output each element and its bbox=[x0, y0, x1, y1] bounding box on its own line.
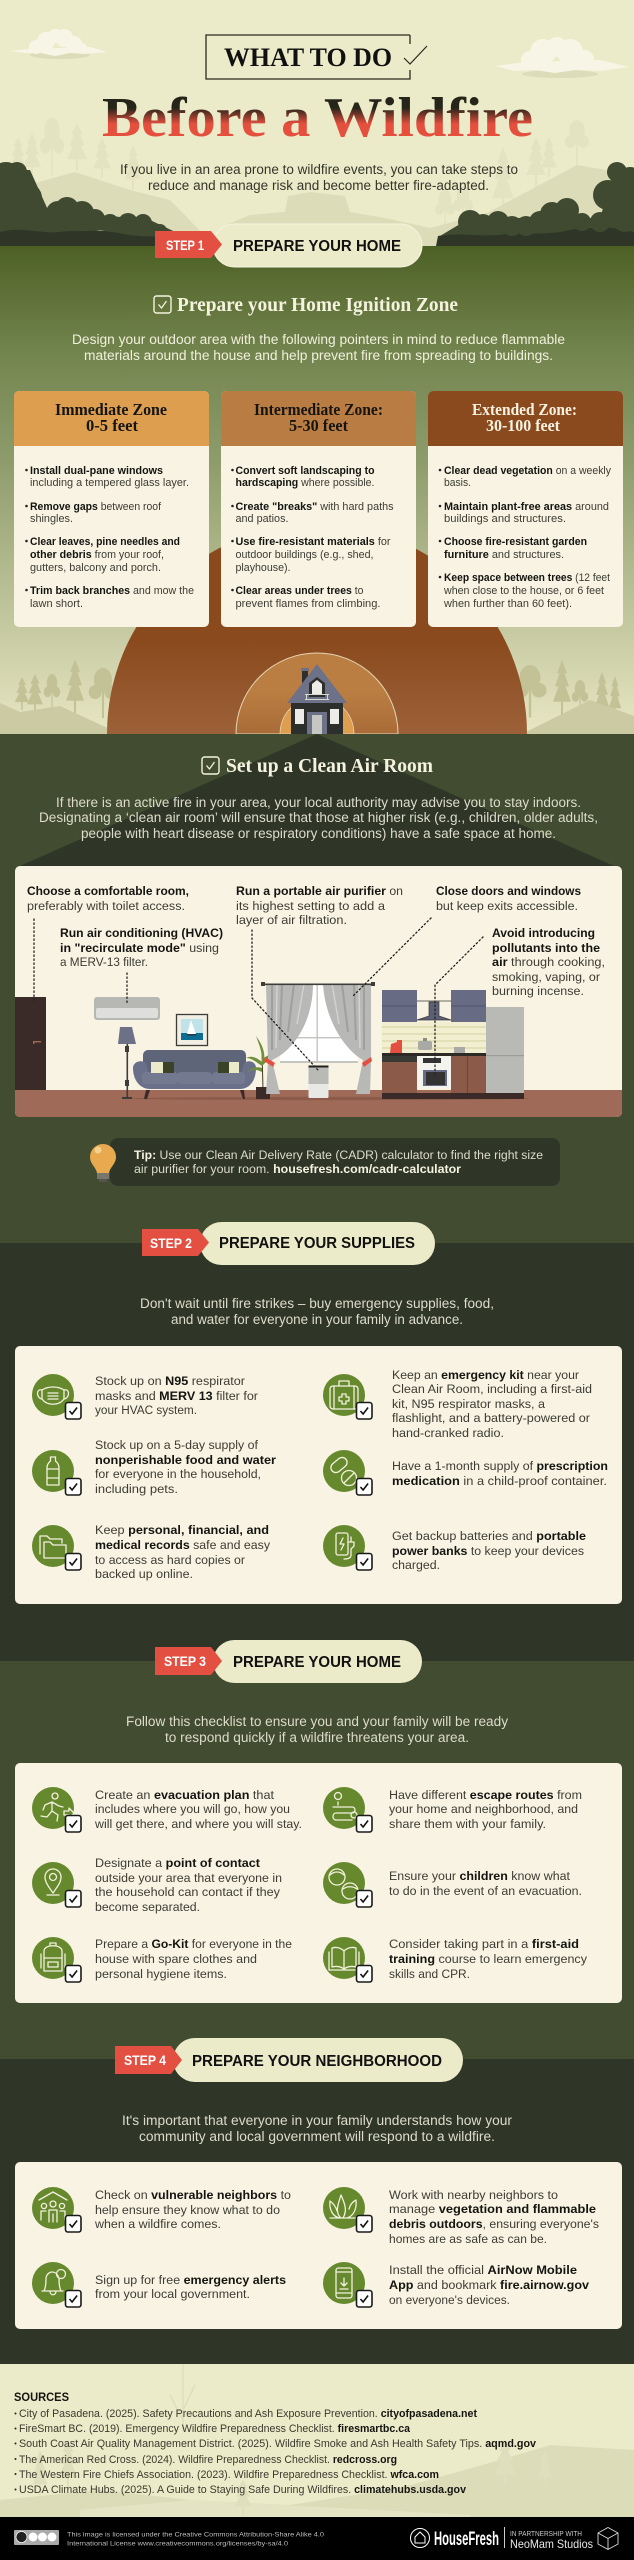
illustration: cloud left bbox=[10, 29, 107, 59]
tip text: air purifier for your room. housefresh.com/cadr-calculator bbox=[134, 1162, 461, 1176]
item: food and water: Stock up on a 5-day supply of bbox=[95, 1438, 259, 1452]
sources list: USDA Climate Hubs. (2025). A Guide to Staying Safe During Wildfires. climatehubs.usda.gov bbox=[19, 2484, 466, 2496]
item: point of contact: Designate a point of contact bbox=[95, 1856, 260, 1870]
zone checklist: including a tempered glass layer. bbox=[30, 477, 189, 489]
illustration: cloud right bbox=[495, 37, 629, 78]
item: emergency alerts bbox=[32, 2262, 286, 2307]
item: airnow app: Install the official AirNow Mobile bbox=[389, 2263, 577, 2277]
callout: pollutants: Avoid introducing bbox=[492, 926, 595, 940]
sources heading: SOURCES bbox=[14, 2390, 69, 2404]
item: masks and filter: Stock up on N95 respirator bbox=[95, 1374, 245, 1388]
item: go-kit: house with spare clothes and bbox=[95, 1952, 257, 1966]
logo: NeoMam Studios: NeoMam Studios bbox=[510, 2537, 593, 2551]
item: go-kit: Prepare a Go-Kit for everyone in the bbox=[95, 1937, 292, 1951]
item: point of contact bbox=[32, 1856, 282, 1914]
zone checklist: Clear leaves, pine needles and bbox=[30, 536, 180, 548]
item: vulnerable neighbors: help ensure they know what to do bbox=[95, 2203, 280, 2217]
zone checklist: when further than 60 feet). bbox=[443, 598, 572, 610]
item: vegetation and debris bbox=[323, 2187, 599, 2246]
illustration: dark bushes right bbox=[436, 162, 634, 246]
zone checklist: when close to the house, or 6 feet bbox=[443, 585, 605, 597]
zone heading: 5-30 feet bbox=[289, 416, 348, 435]
callout: air conditioning: Run air conditioning (HVAC) bbox=[60, 926, 223, 940]
callout: air purifier: its highest setting to add a bbox=[236, 899, 385, 913]
icon: open book bbox=[323, 1937, 372, 1982]
floor bbox=[15, 1090, 622, 1117]
item: records: to access as hard copies or bbox=[95, 1553, 245, 1567]
panel: extended zone bbox=[428, 391, 623, 627]
callout: pollutants bbox=[492, 926, 605, 998]
zone checklist bbox=[439, 465, 611, 610]
logo: HouseFresh: HouseFresh bbox=[434, 2529, 499, 2550]
sources list: The Western Fire Chiefs Association. (2023). Wildfire Preparedness Checklist. wfca.com bbox=[19, 2469, 439, 2481]
item: escape routes bbox=[323, 1787, 582, 1832]
item: prescription medication: Have a 1-month supply of prescription bbox=[392, 1459, 608, 1473]
clean air room description: people with heart disease or respiratory conditions) have a safe space at home. bbox=[81, 826, 556, 841]
item: vulnerable neighbors: Check on vulnerable neighbors to bbox=[95, 2188, 291, 2202]
curtain left bbox=[264, 984, 313, 1094]
item: first-aid training: training course to learn emergency bbox=[389, 1952, 588, 1966]
item: emergency kit: Keep an emergency kit near your bbox=[392, 1368, 579, 1382]
item: point of contact: outside your area that everyone in bbox=[95, 1871, 282, 1885]
item: first-aid training bbox=[323, 1937, 588, 1982]
item: evacuation plan: includes where you will go, how you bbox=[95, 1802, 290, 1816]
sources list: City of Pasadena. (2025). Safety Precautions and Ash Exposure Prevention. cityofpasadena.net bbox=[19, 2408, 477, 2420]
intro text bbox=[120, 162, 518, 193]
kitchen bbox=[382, 990, 524, 1099]
icon: bell bbox=[32, 2262, 81, 2307]
ignition zone description: Design your outdoor area with the following pointers in mind to reduce flammable bbox=[72, 332, 565, 347]
sofa bbox=[133, 1050, 256, 1099]
panel: immediate zone bbox=[14, 391, 209, 627]
item: emergency kit: kit, N95 respirator masks, a bbox=[392, 1397, 545, 1411]
ignition zone description: materials around the house and help prevent fire from spreading to buildings. bbox=[84, 348, 553, 363]
inner arch: immediate zone bbox=[280, 697, 354, 734]
zone checklist: buildings and structures. bbox=[444, 513, 566, 525]
illustration: sources landscape bbox=[0, 2364, 634, 2517]
item: first-aid training: skills and CPR. bbox=[389, 1967, 470, 1981]
item: evacuation plan bbox=[32, 1787, 302, 1832]
callout: doors and windows: Close doors and windows bbox=[436, 884, 581, 898]
callout: air purifier bbox=[236, 884, 403, 927]
callout: pollutants: air through cooking, bbox=[492, 955, 605, 969]
roof shape behind heading bbox=[20, 734, 614, 866]
icon: folders bbox=[32, 1525, 81, 1570]
callout: pollutants: smoking, vaping, or bbox=[492, 970, 600, 984]
sources list bbox=[14, 2408, 536, 2496]
step 3 description bbox=[126, 1714, 508, 1745]
section background: step 4 bbox=[0, 2059, 634, 2364]
item: point of contact: the household can contact if they bbox=[95, 1885, 281, 1899]
step 4 description bbox=[122, 2113, 513, 2144]
item: emergency alerts: Sign up for free emergency alerts bbox=[95, 2273, 286, 2287]
item: airnow app bbox=[323, 2262, 589, 2307]
item: food and water: for everyone in the household, bbox=[95, 1467, 261, 1481]
zone checklist: hardscaping where possible. bbox=[236, 477, 374, 489]
ignition zone description bbox=[72, 332, 565, 363]
zone checklist: outdoor buildings (e.g., shed, bbox=[236, 549, 374, 561]
sources list: FireSmart BC. (2019). Emergency Wildfire Preparedness Checklist. firesmartbc.ca bbox=[19, 2423, 410, 2435]
step 2 description: and water for everyone in your family in advance. bbox=[171, 1312, 463, 1327]
sources list: South Coast Air Quality Management District. (2025). Wildfire Smoke and Ash Health Safety Tips. aqmd.gov bbox=[19, 2438, 536, 2450]
clean air room description: Designating a ‘clean air room’ will ensure that those at higher risk (e.g., children, older adults, bbox=[39, 810, 598, 825]
step 4 badge bbox=[115, 2038, 463, 2082]
item: vegetation and debris: Work with nearby neighbors to bbox=[389, 2188, 558, 2202]
zone heading: 0-5 feet bbox=[86, 416, 138, 435]
callout: pollutants: pollutants into the bbox=[492, 941, 600, 955]
zone heading: Immediate Zone bbox=[55, 400, 167, 419]
item: evacuation plan: will get there, and where you will stay. bbox=[94, 1817, 302, 1831]
item: airnow app: App and bookmark fire.airnow.gov bbox=[389, 2278, 589, 2292]
icon: creative commons badge bbox=[14, 2530, 59, 2545]
icon: first-aid kit bbox=[323, 1374, 372, 1419]
step 2 description: Don't wait until fire strikes – buy emergency supplies, food, bbox=[140, 1296, 494, 1311]
zone checklist: and patios. bbox=[236, 513, 288, 525]
intro text: reduce and manage risk and become better fire-adapted. bbox=[148, 178, 489, 193]
item: records: Keep personal, financial, and bbox=[95, 1523, 269, 1537]
background: sky bbox=[0, 0, 634, 246]
panel: clean air room illustration bbox=[15, 866, 622, 1117]
zone checklist: Maintain plant-free areas around bbox=[444, 501, 609, 513]
item: escape routes: share them with your family. bbox=[389, 1817, 546, 1831]
icon: plants bbox=[323, 2187, 372, 2232]
item: vulnerable neighbors bbox=[32, 2187, 291, 2232]
license text bbox=[67, 2532, 324, 2548]
item: vulnerable neighbors: when a wildfire comes. bbox=[94, 2217, 221, 2231]
item: batteries: power banks to keep your devices bbox=[392, 1544, 584, 1558]
step 1 badge: PREPARE YOUR HOME bbox=[233, 238, 401, 255]
item: records: backed up online. bbox=[95, 1567, 193, 1581]
step 4 badge: PREPARE YOUR NEIGHBORHOOD bbox=[192, 2053, 442, 2070]
zone checklist: lawn short. bbox=[30, 598, 83, 610]
callout: air conditioning bbox=[60, 926, 223, 969]
item: prescription medication bbox=[323, 1450, 608, 1495]
middle arch: intermediate zone bbox=[236, 653, 398, 734]
item: food and water: including pets. bbox=[95, 1482, 178, 1496]
item: emergency kit: hand-cranked radio. bbox=[392, 1426, 504, 1440]
item: vegetation and debris: manage vegetation and flammable bbox=[389, 2202, 596, 2216]
step 4 badge: STEP 4 bbox=[124, 2052, 166, 2068]
section background: step 1 green gradient bbox=[0, 246, 634, 734]
footer bar bbox=[0, 2517, 634, 2560]
zone checklist: Use fire-resistant materials for bbox=[236, 536, 391, 548]
item: batteries: charged. bbox=[392, 1558, 440, 1572]
floor lamp bbox=[118, 1027, 136, 1099]
icon: house bbox=[287, 664, 347, 734]
zone heading: 30-100 feet bbox=[486, 416, 560, 435]
callout: comfortable room: preferably with toilet access. bbox=[27, 899, 185, 913]
item: prescription medication: medication in a child-proof container. bbox=[392, 1474, 607, 1488]
illustration: dark bushes left bbox=[0, 162, 200, 246]
item: vegetation and debris: debris outdoors, ensuring everyone's bbox=[389, 2217, 599, 2231]
item: children: Ensure your children know what bbox=[389, 1869, 571, 1883]
item: records: medical records safe and easy bbox=[95, 1538, 271, 1552]
zone checklist: shingles. bbox=[30, 513, 73, 525]
zone checklist: Install dual-pane windows bbox=[30, 465, 163, 477]
zone checklist bbox=[231, 465, 394, 610]
item: batteries bbox=[323, 1525, 586, 1572]
callout: doors and windows bbox=[436, 884, 581, 913]
item: batteries: Get backup batteries and portable bbox=[392, 1529, 586, 1543]
panel: home checklist bbox=[15, 1763, 622, 2003]
zone checklist: other debris from your roof, bbox=[30, 549, 164, 561]
zone checklist: Clear dead vegetation on a weekly bbox=[444, 465, 611, 477]
item: masks and filter bbox=[32, 1374, 258, 1419]
heading: home ignition zone: Prepare your Home Ignition Zone bbox=[177, 294, 458, 316]
item: food and water: nonperishable food and water bbox=[95, 1453, 276, 1467]
zone checklist: basis. bbox=[444, 477, 471, 489]
logo: NeoMam Studios bbox=[510, 2528, 618, 2551]
item: emergency kit bbox=[323, 1368, 592, 1440]
step 3 badge: PREPARE YOUR HOME bbox=[233, 1654, 401, 1671]
item: children bbox=[323, 1862, 582, 1907]
icon: map pin bbox=[32, 1862, 81, 1907]
item: escape routes: your home and neighborhood, and bbox=[389, 1802, 578, 1816]
item: point of contact: become separated. bbox=[95, 1900, 200, 1914]
kicker: what to do: WHAT TO DO bbox=[224, 42, 392, 72]
icon: water bottle bbox=[32, 1450, 81, 1495]
step 2 badge: PREPARE YOUR SUPPLIES bbox=[219, 1235, 415, 1252]
step 4 description: community and local government will respond to a wildfire. bbox=[139, 2129, 495, 2144]
clean air room description bbox=[39, 795, 598, 841]
callout: comfortable room bbox=[27, 884, 189, 913]
icon: backpack bbox=[32, 1937, 81, 1982]
callout: air conditioning: in "recirculate mode" using bbox=[60, 941, 219, 955]
license text: International License www.creativecommons.org/licenses/by-sa/4.0 bbox=[67, 2540, 288, 2548]
item: masks and filter: masks and MERV 13 filter for bbox=[95, 1389, 258, 1403]
heading: clean air room: Set up a Clean Air Room bbox=[226, 755, 433, 777]
step 1 badge bbox=[155, 224, 422, 267]
icon: pills bbox=[323, 1450, 372, 1495]
step 3 badge: STEP 3 bbox=[164, 1653, 206, 1669]
step 2 badge bbox=[142, 1222, 435, 1265]
zone checklist: furniture and structures. bbox=[444, 549, 564, 561]
illustration: hills and trees beside the arch bbox=[0, 659, 634, 734]
illustration: zone arches and house bbox=[107, 524, 527, 734]
item: evacuation plan: Create an evacuation plan that bbox=[95, 1788, 275, 1802]
zone checklist: Create "breaks" with hard paths bbox=[236, 501, 394, 513]
step 1 badge: STEP 1 bbox=[166, 237, 204, 253]
curtain rod bbox=[261, 982, 375, 986]
air purifier bbox=[308, 1066, 328, 1098]
tip text: Tip: Use our Clean Air Delivery Rate (CADR) calculator to find the right size bbox=[134, 1148, 543, 1162]
icon: power bank bbox=[323, 1525, 372, 1570]
zone checklist: prevent flames from climbing. bbox=[236, 598, 380, 610]
zone heading bbox=[254, 400, 383, 435]
zone checklist: Keep space between trees (12 feet bbox=[444, 572, 611, 584]
door bbox=[15, 997, 46, 1090]
icon: people under roof bbox=[32, 2187, 81, 2232]
callout: air purifier: Run a portable air purifier on bbox=[236, 884, 403, 898]
step 3 badge bbox=[155, 1640, 422, 1683]
item: children: to do in the event of an evacuation. bbox=[389, 1884, 582, 1898]
icon: route bbox=[323, 1787, 372, 1832]
icon: running person bbox=[32, 1787, 81, 1832]
potted plant bbox=[246, 1036, 274, 1099]
zone checklist: playhouse). bbox=[236, 562, 290, 574]
icon: mask bbox=[32, 1374, 81, 1419]
zone checklist: gutters, balcony and porch. bbox=[30, 562, 161, 574]
clean air room description: If there is an active fire in your area, your local authority may advise you to stay indoors. bbox=[56, 795, 581, 810]
zone checklist: Convert soft landscaping to bbox=[236, 465, 375, 477]
icon: children faces bbox=[323, 1862, 372, 1907]
title: Before a Wildfire bbox=[102, 87, 533, 149]
section background: step 3 bbox=[0, 1661, 634, 2059]
zone checklist bbox=[25, 465, 194, 610]
section background: clean air room bbox=[0, 734, 634, 1243]
item: go-kit: personal hygiene items. bbox=[95, 1967, 227, 1981]
wall picture bbox=[176, 1014, 208, 1046]
section background: step 2 bbox=[0, 1243, 634, 1661]
zone heading bbox=[472, 400, 577, 435]
zone checklist: Clear areas under trees to bbox=[236, 585, 364, 597]
intro text: If you live in an area prone to wildfire events, you can take steps to bbox=[120, 162, 518, 177]
illustration: pale background landscape bbox=[0, 118, 634, 246]
callout: comfortable room: Choose a comfortable room, bbox=[27, 884, 189, 898]
item: masks and filter: your HVAC system. bbox=[95, 1403, 197, 1417]
zone heading: Intermediate Zone: bbox=[254, 400, 383, 419]
license text: This image is licensed under the Creative Commons Attribution-Share Alike 4.0 bbox=[67, 2532, 324, 2538]
zone checklist: Trim back branches and mow the bbox=[30, 585, 194, 597]
tip text bbox=[134, 1148, 543, 1176]
tip callout bbox=[90, 1138, 560, 1186]
panel: neighborhood checklist bbox=[15, 2162, 622, 2329]
step 4 description: It's important that everyone in your family understands how your bbox=[122, 2113, 513, 2128]
item: airnow app: on everyone's devices. bbox=[389, 2293, 510, 2307]
sources list: The American Red Cross. (2024). Wildfire Preparedness Checklist. redcross.org bbox=[19, 2454, 397, 2466]
air conditioner bbox=[94, 997, 160, 1020]
item: vegetation and debris: homes are as safe as can be. bbox=[389, 2232, 547, 2246]
item: food and water bbox=[32, 1438, 276, 1496]
curtain right bbox=[323, 984, 372, 1094]
item: first-aid training: Consider taking part in a first-aid bbox=[389, 1937, 579, 1951]
section background: sources bbox=[0, 2364, 634, 2517]
callout: air conditioning: a MERV-13 filter. bbox=[60, 955, 148, 969]
item: go-kit bbox=[32, 1937, 292, 1982]
step 2 badge: STEP 2 bbox=[150, 1235, 192, 1251]
callout: pollutants: burning incense. bbox=[492, 984, 584, 998]
callout lines bbox=[34, 918, 483, 1075]
zone checklist: Remove gaps between roof bbox=[30, 501, 162, 513]
zone heading bbox=[55, 400, 167, 435]
icon: phone download bbox=[323, 2262, 372, 2307]
callout: doors and windows: but keep exits accessible. bbox=[436, 899, 578, 913]
item: emergency alerts: from your local government. bbox=[95, 2287, 250, 2301]
window bbox=[280, 985, 358, 1063]
outer arch: extended zone bbox=[107, 524, 527, 734]
zone heading: Extended Zone: bbox=[472, 400, 577, 419]
logo: HouseFresh bbox=[410, 2528, 499, 2550]
icon: light bulb bbox=[90, 1144, 116, 1182]
step 3 description: to respond quickly if a wildfire threatens your area. bbox=[165, 1730, 469, 1745]
callout: air purifier: layer of air filtration. bbox=[236, 913, 347, 927]
logo: NeoMam Studios: IN PARTNERSHIP WITH bbox=[510, 2531, 582, 2538]
zone checklist: Choose fire-resistant garden bbox=[444, 536, 587, 548]
item: escape routes: Have different escape routes from bbox=[389, 1788, 582, 1802]
panel: intermediate zone bbox=[221, 391, 416, 627]
kicker: what to do bbox=[206, 35, 427, 79]
step 2 description bbox=[140, 1296, 494, 1327]
item: emergency kit: Clean Air Room, including a first-aid bbox=[392, 1382, 592, 1396]
step 3 description: Follow this checklist to ensure you and your family will be ready bbox=[126, 1714, 508, 1729]
item: emergency kit: flashlight, and a battery-powered or bbox=[392, 1411, 590, 1425]
item: records bbox=[32, 1523, 271, 1581]
panel: supplies bbox=[15, 1346, 622, 1604]
